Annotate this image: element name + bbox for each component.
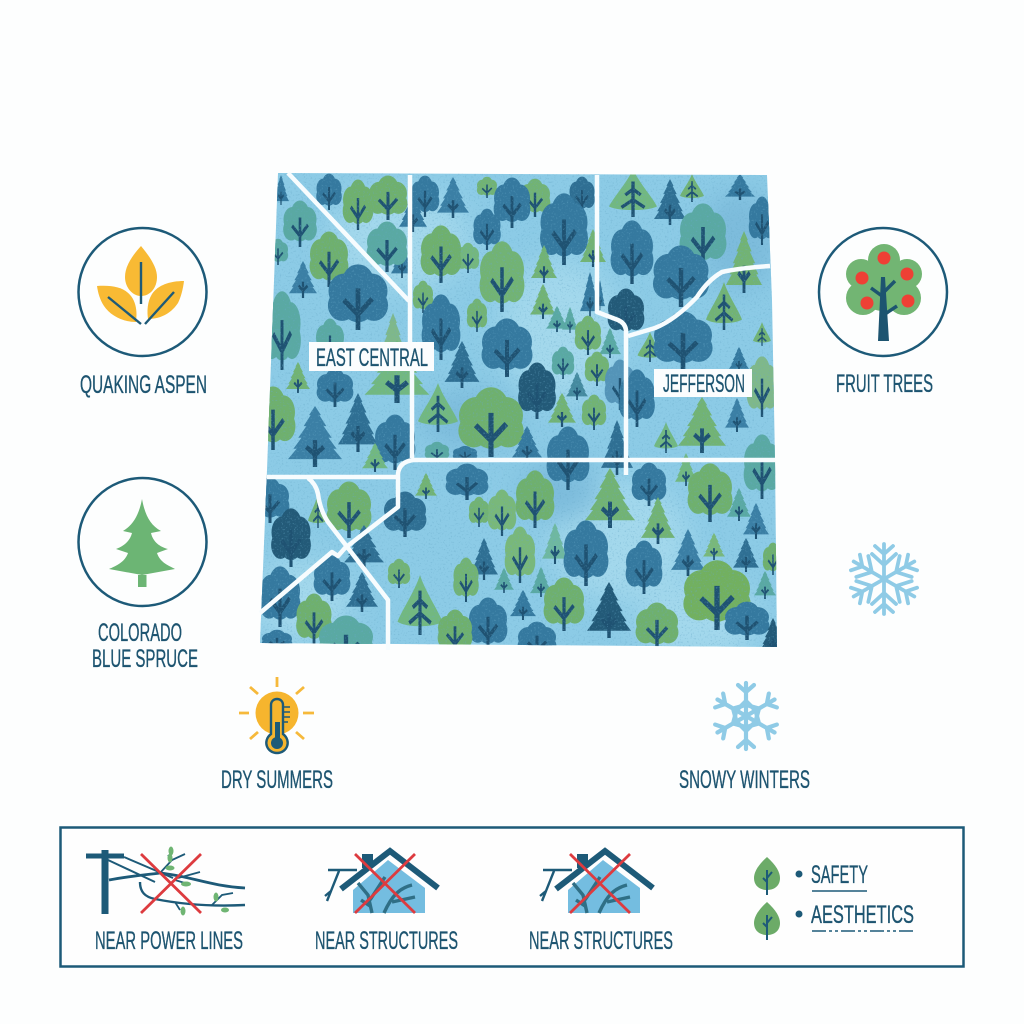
panel: Quaking Aspen — [78, 228, 207, 399]
icon: snowflake — [713, 683, 779, 749]
panel: Fruit Trees — [819, 228, 947, 398]
text: Fruit Trees: FRUIT TREES — [836, 370, 933, 398]
icon: branches near power lines — [86, 846, 245, 916]
text: Near Power Lines: NEAR POWER LINES — [95, 927, 243, 955]
panel: Dry Summers — [221, 677, 333, 794]
label: Jefferson: JEFFERSON — [663, 370, 745, 398]
text: Snowy Winters: SNOWY WINTERS — [679, 766, 810, 794]
icon: branches near house — [325, 851, 438, 913]
text: Safety: SAFETY — [811, 861, 868, 889]
text: Aesthetics: AESTHETICS — [811, 901, 914, 929]
text: Near Structures: NEAR STRUCTURES — [315, 927, 458, 955]
trees: northern section — [251, 169, 780, 499]
panel: Colorado Blue Spruce — [78, 478, 206, 673]
trees: southern section — [261, 453, 777, 647]
text: Colorado Blue Spruce: BLUE SPRUCE — [92, 645, 198, 673]
text: Colorado Blue Spruce — [92, 619, 198, 673]
icon: sun with thermometer — [239, 677, 314, 753]
map: forested regions — [250, 165, 790, 668]
text: Colorado Blue Spruce: COLORADO — [98, 619, 182, 647]
region boundaries — [260, 173, 775, 650]
icon: leaf safety — [754, 857, 780, 895]
icon: branches near house second — [540, 851, 653, 913]
text: Dry Summers: DRY SUMMERS — [221, 766, 333, 794]
icon: spruce tree — [78, 478, 206, 606]
text: Aesthetics — [796, 901, 914, 931]
icon: aspen leaves — [78, 228, 206, 356]
text: Safety — [796, 861, 868, 891]
text: Quaking Aspen: QUAKING ASPEN — [80, 371, 207, 399]
panel: Snowy Winters — [679, 683, 810, 794]
icon: leaf aesthetics — [754, 902, 780, 940]
label: Jefferson — [654, 369, 752, 398]
text: Near Structures second: NEAR STRUCTURES — [529, 927, 673, 955]
label: East Central: EAST CENTRAL — [316, 344, 428, 372]
icon: snowflake right — [848, 544, 920, 614]
label: East Central — [309, 342, 434, 372]
panel: pruning legend — [60, 828, 964, 966]
icon: fruit tree — [819, 228, 947, 356]
